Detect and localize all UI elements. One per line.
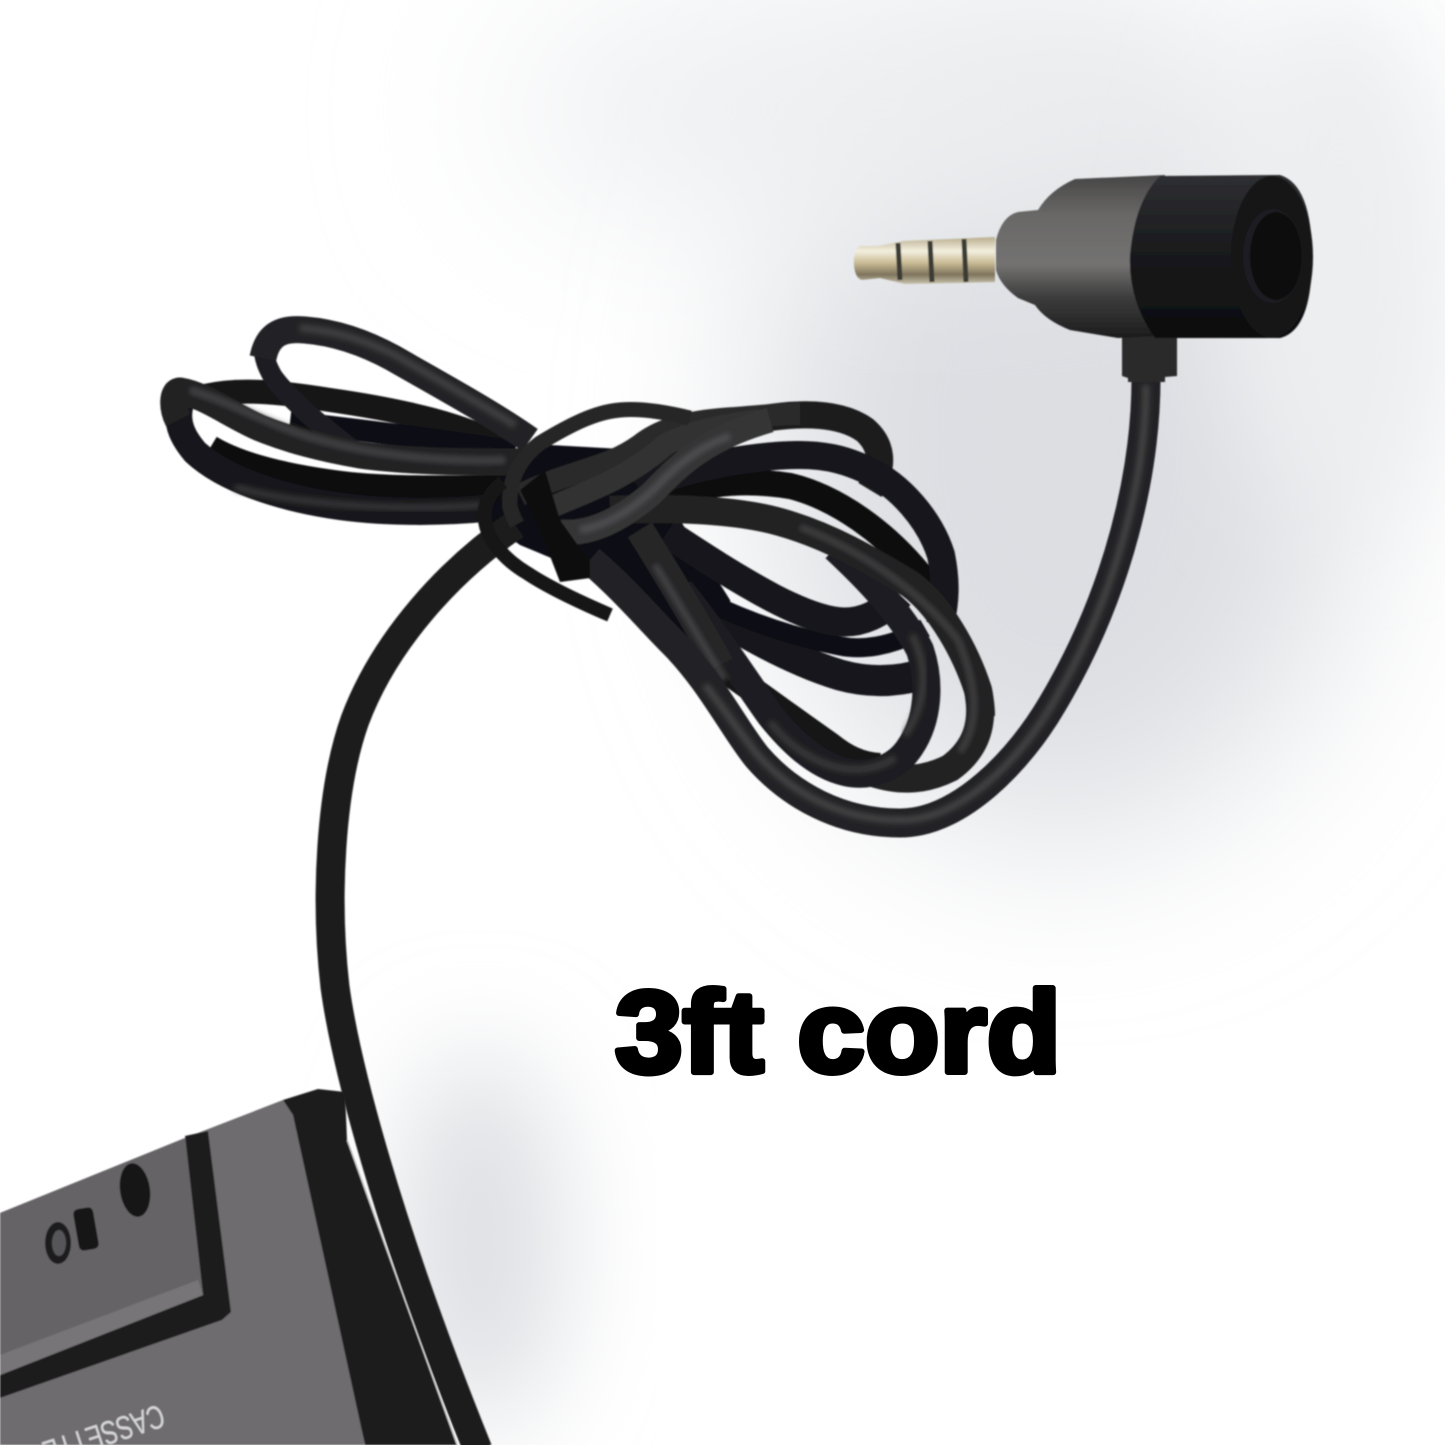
front face [1231,176,1313,338]
recessed grip panel [0,1131,231,1398]
metal collar [996,175,1165,338]
strain relief [1122,336,1177,382]
dark core behind knot [485,445,745,690]
mounting hole [116,1161,154,1219]
slot [73,1207,99,1251]
cassette face [0,1100,365,1445]
right back loops [610,415,981,779]
main cord to plug [590,378,1146,823]
left coil loops [174,328,530,511]
push button [1243,209,1303,303]
gold jack tip [854,237,995,284]
title: 3ft cord: 3ft cord [615,967,1061,1097]
thin tie strand [485,409,690,615]
coiled cord bundle [174,328,1146,1445]
knot bundle strands [520,414,800,532]
black barrel [1130,175,1312,338]
cassette adapter [0,1089,457,1445]
3.5mm audio plug [854,175,1313,382]
screw [45,1222,71,1264]
long lead to cassette [330,525,515,1445]
cassette side edge [283,1089,457,1445]
knot dark wrap [520,470,590,582]
